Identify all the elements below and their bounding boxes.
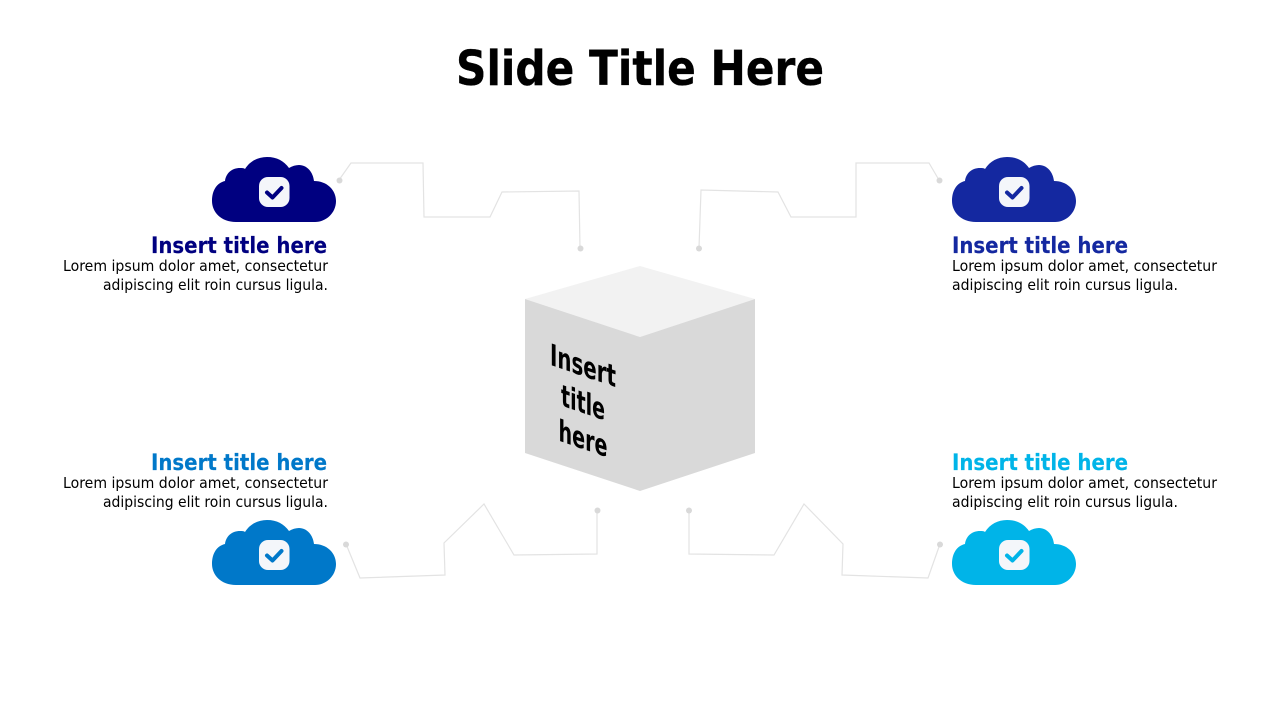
cube left face <box>525 299 640 491</box>
cube label: title <box>561 378 605 428</box>
text block: bottom left: Lorem ipsum dolor amet, consectetur <box>63 474 329 492</box>
connector: bottom left <box>343 504 600 578</box>
text block: top left: Insert title here <box>151 234 327 259</box>
text block: bottom right: Lorem ipsum dolor amet, consectetur <box>952 474 1218 492</box>
icon: cloud top right <box>952 157 1076 222</box>
text block: top right <box>952 234 1218 294</box>
title: Slide Title Here <box>456 41 824 97</box>
connector: bottom right <box>686 504 943 578</box>
connector: top left <box>336 163 584 252</box>
cube top face <box>525 266 755 337</box>
icon: cloud bottom left <box>212 520 336 585</box>
cube label <box>550 338 616 465</box>
cube label: Insert <box>550 338 616 395</box>
icon: cloud bottom right <box>952 520 1076 585</box>
text block: bottom left: adipiscing elit roin cursus ligula. <box>103 493 328 511</box>
text block: top right: Lorem ipsum dolor amet, consectetur <box>952 257 1218 275</box>
text block: bottom left <box>63 451 329 511</box>
central cube <box>525 266 755 491</box>
connector: top right <box>696 163 942 252</box>
cube label: here <box>558 413 608 465</box>
text block: bottom right <box>952 451 1218 511</box>
cube right face <box>640 299 755 491</box>
icon: cloud top left <box>212 157 336 222</box>
text block: top left: Lorem ipsum dolor amet, consectetur <box>63 257 329 275</box>
text block: top right: adipiscing elit roin cursus ligula. <box>952 276 1178 294</box>
text block: top left <box>63 234 329 294</box>
text block: bottom left: Insert title here <box>151 451 327 476</box>
text block: top left: adipiscing elit roin cursus ligula. <box>103 276 328 294</box>
text block: bottom right: Insert title here <box>952 451 1128 476</box>
text block: bottom right: adipiscing elit roin cursus ligula. <box>952 493 1178 511</box>
text block: top right: Insert title here <box>952 234 1128 259</box>
